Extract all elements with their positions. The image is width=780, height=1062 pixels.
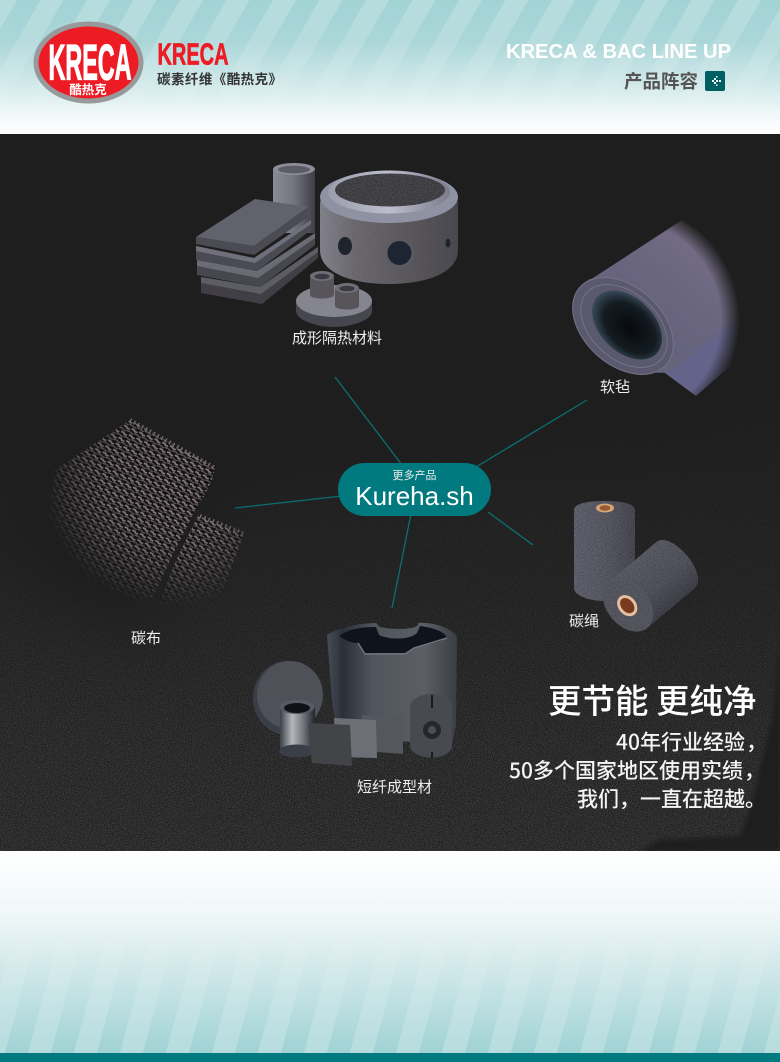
product: molded insulation: [196, 163, 458, 327]
header band: [0, 0, 780, 134]
tagline: 我们，一直在超越。: [577, 784, 766, 814]
label: soft felt: 软毡: [600, 376, 630, 397]
upright spool: [574, 501, 635, 601]
label: carbon rope: 碳绳: [569, 610, 599, 631]
label: short fiber molded parts: 短纤成型材: [357, 776, 432, 797]
header title: KRECA & BAC LINE UP: [506, 41, 731, 63]
product: carbon cloth: [45, 420, 244, 615]
product: carbon rope spools: [574, 501, 706, 641]
disc with stubs: [296, 271, 372, 327]
roll end: [572, 277, 674, 375]
center hub: Kureha.sh: [355, 481, 474, 511]
logo: KRECA oval: KRECA: [48, 34, 132, 90]
large ring: [320, 170, 458, 284]
label: carbon cloth: 碳布: [131, 627, 161, 648]
product: soft felt roll: [572, 220, 738, 396]
dark product panel: [0, 450, 780, 851]
disc: [253, 661, 323, 735]
tagline: 40年行业经验，: [616, 726, 767, 756]
tagline: [509, 726, 767, 814]
tube: [273, 163, 315, 233]
header subtitle: 产品阵容: [624, 71, 698, 92]
split block: [410, 694, 452, 758]
logo: KRECA oval: [34, 22, 144, 104]
roll body: [592, 220, 737, 372]
lying spool: [593, 533, 706, 641]
center hub: 更多产品: [392, 468, 436, 482]
center hub: [338, 463, 491, 516]
bush: [279, 700, 315, 758]
tagline: 50多个国家地区使用实绩，: [509, 755, 765, 785]
footer band: [0, 851, 780, 1062]
brand subtitle: 碳素纤维《酷热克》: [157, 71, 282, 87]
stacked plates: [196, 199, 318, 304]
headline: 更节能 更纯净: [548, 674, 757, 723]
crucible: [327, 623, 457, 744]
brand name: KRECA: [158, 36, 228, 72]
sheet: [664, 316, 738, 396]
small plates: [308, 715, 403, 766]
label: molded insulation: 成形隔热材料: [292, 327, 382, 348]
icon: arrow button: [705, 71, 725, 91]
product: short fiber molded parts: [253, 623, 457, 766]
logo: KRECA oval: 酷热克: [69, 82, 107, 97]
connector lines: [235, 377, 587, 608]
